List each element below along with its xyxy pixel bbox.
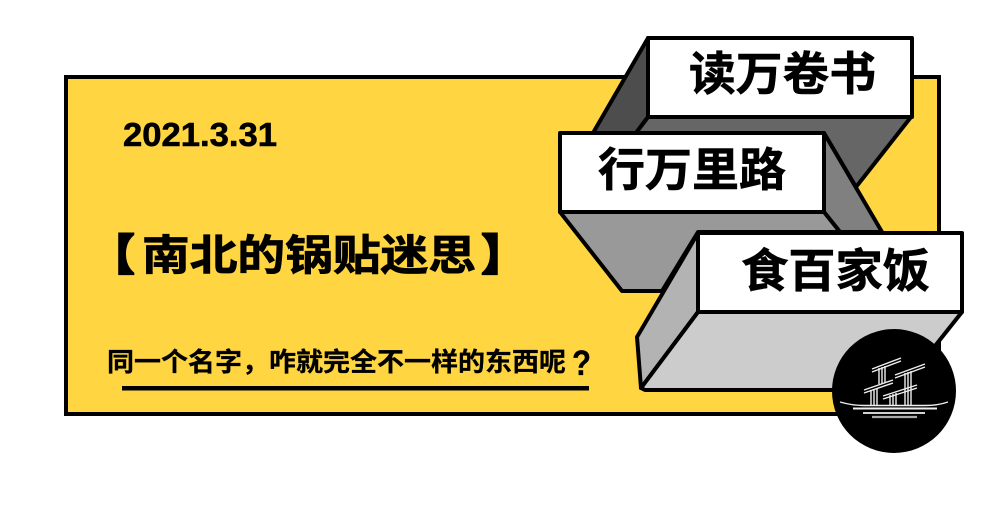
title [92, 232, 524, 279]
block 3 front face [698, 233, 962, 312]
logo circle [832, 329, 956, 453]
block 1 front face [648, 38, 912, 117]
block 2 front face [560, 133, 824, 212]
block 3 bottom face [641, 312, 962, 390]
title: 】 [482, 232, 524, 279]
block: 读万卷书 [593, 38, 912, 187]
date: 2021.3.31 [123, 116, 277, 153]
block 2 right face [824, 133, 882, 232]
panel: yellow background [66, 77, 939, 414]
subtitle: 同一个名字，咋就完全不一样的东西呢 [107, 347, 566, 377]
block: 食百家饭 [637, 233, 962, 390]
block: 行万里路 [560, 133, 882, 291]
block 1 left face [593, 38, 648, 133]
block 2 bottom face [560, 212, 840, 291]
label: 读万卷书: 读万卷书 [689, 48, 876, 100]
block 3 left face [637, 233, 698, 388]
label: 行万里路: 行万里路 [598, 144, 786, 196]
logo architecture lines [840, 358, 948, 417]
block 1 bottom face [636, 117, 911, 187]
title: 【 [92, 232, 134, 279]
subtitle: ? [572, 344, 591, 383]
label: 食百家饭: 食百家饭 [741, 245, 930, 297]
title: 南北的锅贴迷思 [142, 232, 476, 279]
logo badge [832, 329, 956, 453]
subtitle underline [122, 386, 589, 390]
